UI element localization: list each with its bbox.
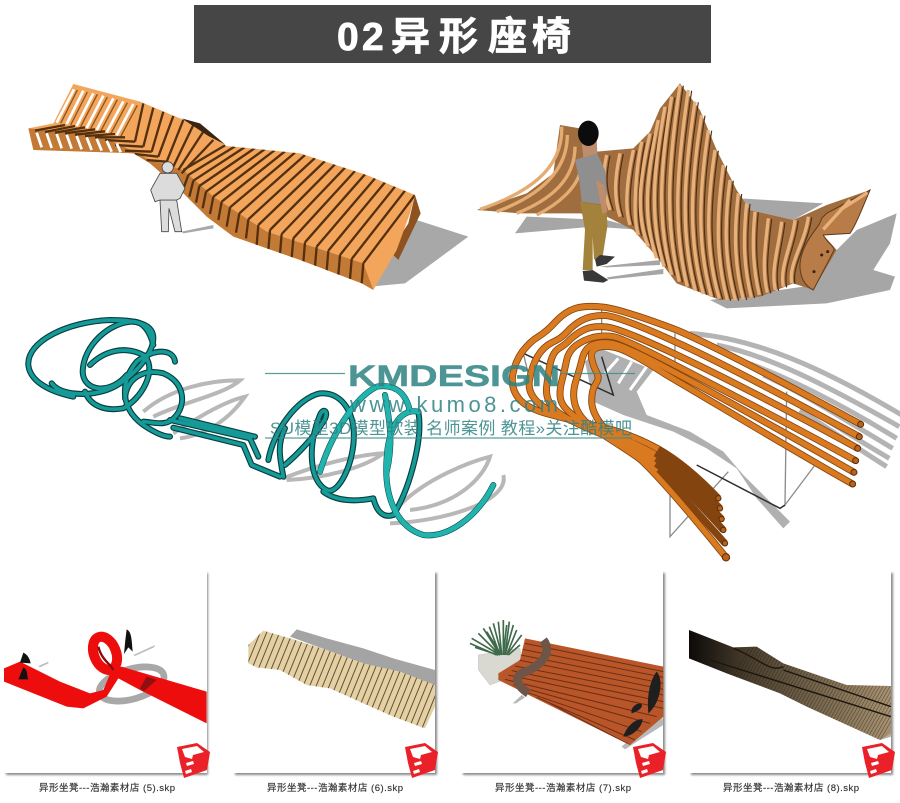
bench end frame [390, 195, 421, 260]
card face [233, 571, 435, 773]
watermark rules [265, 374, 635, 438]
card face [461, 571, 663, 773]
bench body [28, 84, 415, 290]
rib end caps [716, 421, 864, 561]
ribs dark edge [512, 306, 861, 557]
illustration: wooden slat wave bench with standing figure [28, 84, 468, 290]
main slats [604, 85, 808, 300]
bench slat gaps [35, 103, 415, 283]
man [575, 121, 615, 283]
bench shadow [182, 220, 468, 287]
title text: 02异形座椅 [337, 16, 571, 59]
rib shadows [690, 333, 900, 467]
sketchup badge [862, 743, 895, 778]
ribs orange face [512, 306, 861, 557]
thumbnail card 5: red ribbon bench [4, 571, 210, 794]
left wing slats [480, 127, 581, 215]
caption: 异形坐凳---浩瀚素材店 (5).skp [39, 782, 175, 794]
thumbnail card 7: terracotta bench and planter [461, 571, 666, 794]
caption: 异形坐凳---浩瀚素材店 (8).skp [723, 782, 859, 794]
ground shadows [515, 198, 897, 308]
thumbnail card 8: dark woven parametric bench [689, 571, 895, 794]
right end panel [800, 190, 870, 290]
card shadow [691, 573, 893, 775]
title banner [194, 5, 711, 63]
shadow finger cutouts [605, 358, 647, 390]
card face [689, 571, 891, 773]
bench back window gaps [57, 89, 133, 135]
bench front band [28, 128, 373, 290]
slat gap lines [607, 86, 812, 301]
caption: 异形坐凳---浩瀚素材店 (6).skp [267, 782, 403, 794]
card shadow [6, 573, 208, 775]
sketchup badge [177, 743, 210, 778]
card shadow [463, 573, 665, 775]
red ribbon model [4, 629, 207, 723]
lattice model [245, 629, 442, 728]
standing sketch figure [151, 162, 185, 232]
dark underside [182, 118, 225, 144]
card face [4, 571, 207, 773]
woven model [689, 630, 891, 740]
watermark brand name: KMDESIGN [348, 360, 560, 393]
spiral dark outline [28, 320, 493, 535]
caption: 异形坐凳---浩瀚素材店 (7).skp [495, 782, 631, 794]
watermark tagline: SU模型3D模型软装 名师案例 教程»关注酷模吧 [270, 419, 632, 438]
steel supports [523, 310, 815, 537]
watermark [265, 360, 635, 438]
sketchup badge [633, 743, 666, 778]
card shadow [235, 573, 437, 775]
end panel slat ridges [823, 193, 867, 229]
illustration: orange curved rib bench [512, 306, 900, 561]
spiral teal ribbon [28, 320, 419, 516]
bench back dark edges [61, 90, 137, 137]
illustration: teal spiral ribbon bench [28, 320, 504, 535]
spiral shadows [143, 380, 504, 523]
end panel bolt holes [814, 252, 828, 272]
thumbnail card 6: wood lattice bench [233, 571, 442, 794]
bench leg gaps [37, 133, 121, 152]
bench silhouette [477, 83, 870, 300]
bench and planter model [470, 620, 663, 749]
illustration: parametric ribbed bench with man [477, 83, 897, 308]
spiral bright front coils [320, 386, 493, 535]
watermark url: www.kumo8.com [349, 392, 558, 417]
frame shadow [585, 348, 790, 528]
dark brace [523, 353, 785, 508]
sketchup badge [405, 743, 438, 778]
